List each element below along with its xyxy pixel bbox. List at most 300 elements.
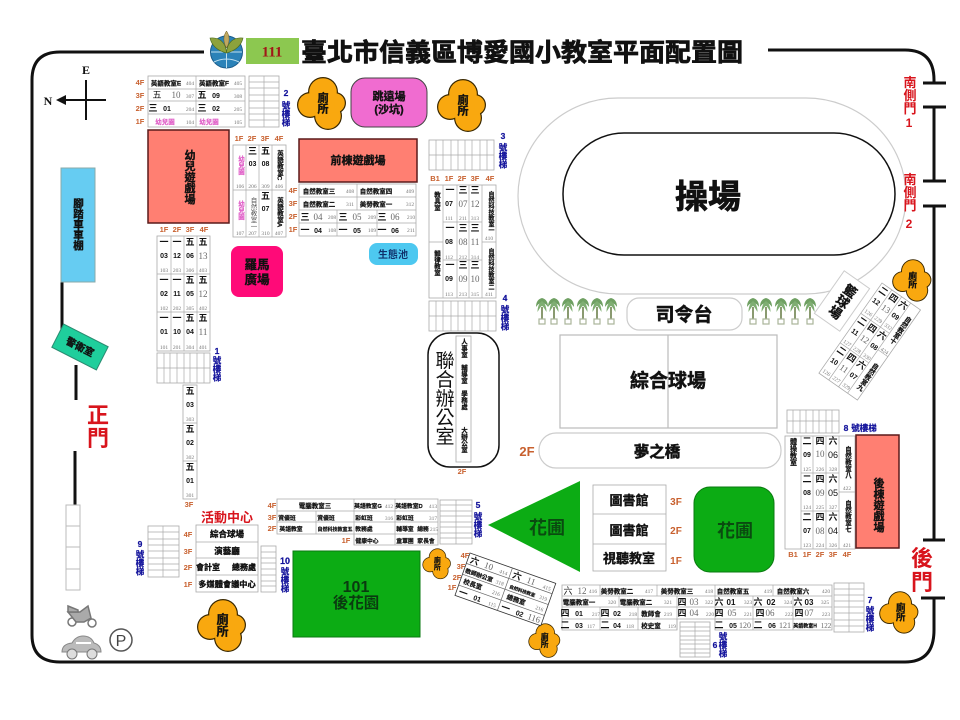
classroom table: south wing: 221 xyxy=(744,612,752,618)
classroom table: back wing: 1F xyxy=(803,550,812,559)
classroom table: front wing: 311 xyxy=(346,202,354,208)
activity centre: 4F xyxy=(184,530,193,539)
classroom table: rotated east wing: 11 xyxy=(838,362,850,375)
classroom table: south wing: 二 xyxy=(714,620,724,630)
classroom table: south block: 資優班 xyxy=(317,514,335,522)
multipurpose court: 綜合球場 xyxy=(630,369,706,392)
classroom table: back wing: 123 xyxy=(803,543,811,549)
classroom table: rotated east wing: 六 xyxy=(897,298,910,312)
classroom table: kindergarten wing: 自然教室一 xyxy=(249,195,257,229)
stairs 3: 號樓梯 xyxy=(498,143,508,170)
classroom table: south wing: 419 xyxy=(764,589,772,595)
classroom table: left wing: 305 xyxy=(186,306,194,312)
library block: 圖書館 xyxy=(609,493,649,508)
rome plaza: 廣場 xyxy=(244,272,270,287)
classroom table: front wing: 美勞教室一 xyxy=(360,200,393,208)
compass xyxy=(44,63,106,120)
back playground xyxy=(856,435,899,548)
classroom table: centre wing: 213 xyxy=(459,292,467,298)
classroom table: rotated south wing: 216 xyxy=(491,590,501,598)
classroom table: back wing: 422 xyxy=(843,486,851,492)
classroom table: back wing: 四 xyxy=(815,474,825,484)
title: 臺北市信義區博愛國小教室平面配置圖 xyxy=(301,38,743,67)
south side gate 2 label: 2 xyxy=(906,217,913,231)
back playground: 後棟遊戲場 xyxy=(872,476,884,533)
building: guard room xyxy=(52,324,108,370)
classroom table: south block: 英語教室 xyxy=(279,525,303,533)
classroom table: centre wing: 212 xyxy=(459,255,467,261)
classroom table: centre wing: 三 xyxy=(470,260,480,270)
classroom table: left wing: 401 xyxy=(199,345,207,351)
classroom table: left wing: 11 xyxy=(173,291,181,298)
classroom table: back wing: 六 xyxy=(828,435,838,446)
classroom table: left wing: 一 xyxy=(172,275,182,285)
classroom table: south wing: 418 xyxy=(705,589,713,595)
classroom table: rotated south wing: 318 xyxy=(495,579,505,588)
classroom table: kindergarten wing: 1F xyxy=(235,134,244,143)
classroom table: kindergarten wing: 406 xyxy=(275,184,283,190)
library block: 3F xyxy=(670,497,682,508)
classroom table: rotated south wing: 校長室 xyxy=(462,577,484,592)
classroom column: grade 5 xyxy=(183,385,197,509)
classroom table: south wing: 六 xyxy=(753,596,763,607)
classroom table: left wing: 3F xyxy=(186,225,195,234)
classroom table: rotated east wing: 四 xyxy=(866,322,879,335)
stairs 3: 3 xyxy=(501,131,506,141)
parking grid xyxy=(66,505,80,590)
classroom table: centre wing: 411 xyxy=(485,292,493,298)
classroom table: kindergarten wing: 幼兒園 xyxy=(236,199,245,221)
rotated court xyxy=(814,271,870,331)
classroom table: centre wing xyxy=(429,174,496,298)
classroom table: top left: 3F xyxy=(136,91,145,100)
classroom table: rotated south wing: 總務室 xyxy=(505,592,527,607)
classroom table: front wing: 109 xyxy=(368,228,376,234)
classroom table: centre wing: 三 xyxy=(470,185,480,195)
classroom table: centre wing: 三 xyxy=(458,260,468,270)
classroom table: rotated south wing: 教師辦公室 xyxy=(464,567,494,584)
classroom table: centre wing: 08 xyxy=(445,239,453,246)
pond: 生態池 xyxy=(378,248,408,261)
stairs 8 xyxy=(787,410,877,433)
classroom column: grade 5: 303 xyxy=(186,417,194,423)
south side gate 1 label: 南側門 xyxy=(902,76,916,116)
classroom table: front wing: 408 xyxy=(346,189,354,195)
classroom table: left wing: 02 xyxy=(160,291,168,298)
classroom table: front wing: 06 xyxy=(390,212,400,222)
classroom table: top left: 4F xyxy=(136,78,145,87)
classroom table: south wing: 05 xyxy=(728,608,737,618)
classroom table: rotated south wing: 115 xyxy=(487,601,497,610)
classroom table: south wing: 自然教室五 xyxy=(717,586,750,596)
classroom table: rotated south wing: 01 xyxy=(472,595,482,604)
classroom table: centre wing: 112 xyxy=(445,255,453,261)
classroom table: south wing: 六 xyxy=(714,596,724,607)
library block xyxy=(593,485,682,571)
toilet 1: 廁所 xyxy=(316,91,328,115)
classroom table: back wing: 4F xyxy=(843,550,852,559)
classroom table: kindergarten wing: 2F xyxy=(248,134,257,143)
activity centre xyxy=(184,510,258,592)
classroom table: centre wing: 10 xyxy=(470,274,480,284)
south side gate 2 label: 南側門 xyxy=(902,172,916,213)
classroom table: top left: 204 xyxy=(186,107,194,113)
sand pit: 跳遠場 xyxy=(372,89,406,103)
classroom table: south wing: 06 xyxy=(766,608,775,618)
stairs 9 xyxy=(135,526,179,577)
classroom table: left wing: 一 xyxy=(159,313,169,323)
classroom table: rotated east wing: 228 xyxy=(851,346,862,356)
classroom table: rotated south wing: 六 xyxy=(511,569,523,582)
classroom table: rotated east wing: 二 xyxy=(835,344,848,358)
classroom table: front wing: 一 xyxy=(377,225,387,235)
classroom table: rotated east wing: 08 xyxy=(868,342,879,352)
classroom column: grade 5: 五 xyxy=(185,462,195,472)
classroom table: top left: 205 xyxy=(234,107,242,113)
classroom table: back wing: 226 xyxy=(816,467,824,473)
classroom table: back wing: 327 xyxy=(829,505,837,511)
classroom table: top left: 三 xyxy=(148,103,158,113)
classroom table: back wing: 07 xyxy=(803,528,811,535)
classroom table: south block: 輔導室 xyxy=(396,525,414,533)
rounded garden xyxy=(694,487,774,572)
classroom table: south wing: 323 xyxy=(744,600,752,606)
classroom table: south wing: 04 xyxy=(690,608,699,618)
classroom table: front wing: 409 xyxy=(406,189,414,195)
classroom table: centre wing: B1 xyxy=(430,174,440,183)
year badge: 111 xyxy=(262,44,282,60)
classroom table: left wing: 101 xyxy=(160,345,168,351)
classroom table: back wing: 六 xyxy=(828,511,838,522)
classroom table: centre wing: 314 xyxy=(471,255,479,261)
classroom table: front wing: 05 xyxy=(353,228,361,235)
classroom table: south wing xyxy=(560,585,832,630)
classroom table: south block: 4F xyxy=(268,501,277,510)
classroom table: rotated east wing: 自然教室十 xyxy=(887,313,913,346)
classroom table: left wing: 12 xyxy=(198,289,208,299)
classroom table: south wing: 四 xyxy=(794,608,804,618)
joint office: 聯合辦公室 xyxy=(432,350,454,446)
year badge xyxy=(246,38,299,64)
classroom table: rotated south wing: 02 xyxy=(514,610,524,619)
stairs 8: 8 xyxy=(844,423,849,433)
classroom table: rotated south wing: 216 xyxy=(534,605,544,614)
classroom table: left wing xyxy=(157,225,210,351)
classroom table: south block: 健康中心 xyxy=(355,537,379,545)
toilet 7 xyxy=(879,591,918,634)
classroom table: south wing: 222 xyxy=(785,612,793,618)
classroom table: front wing: 05 xyxy=(352,212,362,222)
dream bridge: 2F xyxy=(519,444,535,459)
stairs 4: 4 xyxy=(503,293,508,303)
classroom table: front wing: 一 xyxy=(300,225,310,235)
stairs 9: 9 xyxy=(138,539,143,549)
classroom table: rotated east wing: 09 xyxy=(890,312,900,322)
classroom table: front wing: 一 xyxy=(338,225,348,235)
classroom table: south wing: 二 xyxy=(753,620,763,630)
classroom table: centre wing: 1F xyxy=(445,174,454,183)
classroom table: front wing xyxy=(289,184,416,236)
classroom table: south wing: 03 xyxy=(575,623,583,630)
triangle garden xyxy=(488,481,580,572)
library block: 1F xyxy=(670,556,682,567)
classroom table: kindergarten wing: 106 xyxy=(236,184,244,190)
classroom table: south block: 資優班 xyxy=(278,514,296,522)
classroom table: back wing: 06 xyxy=(828,450,838,460)
classroom table: south wing: 英語教室H xyxy=(793,622,817,630)
classroom table: back wing: 六 xyxy=(828,473,838,484)
classroom table: centre wing: 12 xyxy=(470,199,480,209)
stairs 7 xyxy=(834,583,875,633)
icon: parking sign xyxy=(110,629,132,651)
classroom table: centre wing: 三 xyxy=(470,223,480,233)
activity centre: 1F xyxy=(184,580,193,589)
palms right xyxy=(747,298,816,324)
stairs 4: 號樓梯 xyxy=(500,305,510,332)
classroom table: rotated south wing: 11 xyxy=(525,575,537,587)
classroom table: kindergarten wing: 03 xyxy=(249,161,256,168)
classroom table: centre wing: 08 xyxy=(458,237,468,247)
classroom table: south wing: 223 xyxy=(822,612,830,618)
classroom table: south block: 317 xyxy=(429,516,437,522)
classroom column: grade 5: 302 xyxy=(186,455,194,461)
building: guard room: 警衛室 xyxy=(64,334,96,360)
classroom table: front wing: 2F xyxy=(289,212,298,221)
kindergarten playground: 幼兒遊戲場 xyxy=(183,148,196,205)
classroom table: top left: 1F xyxy=(136,117,145,126)
toilet 7: 廁所 xyxy=(894,602,905,622)
stairs 7: 7 xyxy=(868,595,873,605)
classroom table: front wing: 209 xyxy=(368,215,376,221)
classroom table: centre wing: 111 xyxy=(445,216,453,222)
classroom table: top left: 09 xyxy=(212,93,220,100)
classroom table: front wing: 04 xyxy=(314,228,322,235)
classroom table: south wing: 03 xyxy=(805,598,814,607)
classroom table: left wing: 一 xyxy=(172,313,182,323)
stairs 6: 號樓梯 xyxy=(718,632,728,659)
classroom table: rotated east wing: 二 xyxy=(877,285,890,298)
rotated floor labels: 2F xyxy=(453,573,462,582)
classroom table: left wing: 五 xyxy=(185,275,195,285)
classroom table: back wing: 421 xyxy=(843,543,851,549)
classroom table: rotated east wing: 127 xyxy=(842,339,852,349)
classroom table: south wing: 四 xyxy=(560,608,570,618)
stairs 4 xyxy=(429,293,510,332)
classroom table: south wing: 321 xyxy=(664,600,672,606)
classroom table: rotated east wing: 10 xyxy=(829,357,839,367)
classroom table: centre wing: 三 xyxy=(458,223,468,233)
classroom table: rotated east wing: 332 xyxy=(883,322,893,332)
icon: scooter xyxy=(68,606,96,627)
classroom table: front wing: 自然教室四 xyxy=(360,186,392,196)
building: bicycle shed xyxy=(61,168,95,282)
classroom table: front wing: 自然教室三 xyxy=(303,186,336,196)
classroom table: front wing: 4F xyxy=(289,186,298,195)
activity centre: 3F xyxy=(184,547,193,556)
classroom table: south wing: 420 xyxy=(822,589,830,595)
classroom column: grade 5: 五 xyxy=(185,386,195,396)
classroom table: left wing: 202 xyxy=(173,306,181,312)
classroom column: grade 5: 301 xyxy=(186,493,194,499)
classroom table: south block xyxy=(268,499,438,545)
back gate label xyxy=(911,546,933,595)
front playground xyxy=(299,139,417,182)
joint office: 2F xyxy=(458,467,467,476)
classroom table: kindergarten wing xyxy=(233,134,286,237)
classroom table: back wing: 08 xyxy=(816,526,825,536)
classroom table: top left: 2F xyxy=(136,104,145,113)
classroom table: kindergarten wing: 五 xyxy=(261,191,270,201)
stairs 5: 號樓梯 xyxy=(473,512,483,539)
classroom table: top left: 10 xyxy=(172,90,181,100)
classroom table: south wing: 119 xyxy=(668,624,676,630)
classroom table: back wing: 2F xyxy=(816,550,825,559)
toilet 4 xyxy=(197,599,246,652)
classroom table: south wing: 220 xyxy=(706,612,714,618)
classroom table: kindergarten wing: 310 xyxy=(261,231,270,237)
classroom table: left wing: 201 xyxy=(173,345,181,351)
classroom table: south wing: 217 xyxy=(592,612,600,618)
classroom table: left wing: 102 xyxy=(160,306,168,312)
classroom table: south wing: 219 xyxy=(664,612,672,618)
classroom table: south block: 總務 xyxy=(417,525,429,533)
classroom table: south wing: 04 xyxy=(613,623,621,630)
activity centre: 演藝廳 xyxy=(214,546,240,556)
classroom table: front wing: 3F xyxy=(289,199,298,208)
classroom table: back wing: 四 xyxy=(815,512,825,522)
classroom table: left wing: 一 xyxy=(159,275,169,285)
classroom table: centre wing: 410 xyxy=(485,236,493,242)
classroom table: front wing: 06 xyxy=(391,228,399,235)
classroom table: back wing: 125 xyxy=(803,467,811,473)
classroom table: back wing: 09 xyxy=(803,452,811,459)
classroom table: top left: 幼兒園 xyxy=(199,117,219,126)
classroom table: left wing: 一 xyxy=(159,237,169,247)
classroom table: south wing: 四 xyxy=(600,608,610,618)
dream bridge: 夢之橋 xyxy=(634,442,681,461)
classroom table: left wing: 13 xyxy=(198,251,208,261)
classroom table: top left: 五 xyxy=(152,90,162,100)
classroom table: kindergarten wing: 207 xyxy=(248,231,257,237)
activity centre: 活動中心 xyxy=(201,510,253,525)
classroom table: centre wing: 07 xyxy=(458,199,468,209)
classroom table: top left: 三 xyxy=(197,103,207,113)
classroom table: top left: 02 xyxy=(212,106,220,113)
classroom table: rotated east wing: 六 xyxy=(855,357,868,372)
classroom table: front wing: 三 xyxy=(300,212,310,222)
classroom table: left wing: 一 xyxy=(172,237,182,247)
library block: 圖書館 xyxy=(609,523,649,538)
title bar xyxy=(210,31,743,68)
classroom table: rotated south wing: 415 xyxy=(542,584,552,593)
classroom table: south block: 自然科技教室五 xyxy=(317,526,353,533)
classroom table: kindergarten wing: 407 xyxy=(275,231,283,237)
classroom table: south wing: 自然教室六 xyxy=(777,586,810,596)
classroom table: centre wing: 315 xyxy=(471,292,479,298)
classroom table: left wing: 五 xyxy=(198,275,208,285)
sports field track xyxy=(518,98,906,294)
classroom table: top left: 五 xyxy=(197,90,207,100)
classroom table: front wing: 210 xyxy=(407,215,415,221)
classroom table: left wing: 2F xyxy=(173,225,182,234)
classroom table: back wing: 二 xyxy=(802,436,812,446)
back garden 101: 101 xyxy=(343,579,369,596)
stairs 1: 1 xyxy=(215,346,220,356)
classroom table: back wing xyxy=(785,435,855,559)
classroom table: front wing: 1F xyxy=(289,225,298,234)
classroom table: south wing: 電腦教室一 xyxy=(563,598,596,606)
classroom table: top left: 307 xyxy=(186,94,194,100)
stairs 8: 號樓梯 xyxy=(851,423,877,433)
classroom table: south wing: 118 xyxy=(626,624,634,630)
library block: 2F xyxy=(670,526,682,537)
classroom table: front wing: 211 xyxy=(407,228,415,234)
classroom table: rotated east wing: 12 xyxy=(858,333,871,346)
joint office: 學務處 xyxy=(460,389,468,411)
classroom table: front wing: 三 xyxy=(377,212,387,222)
rotated floor labels: 3F xyxy=(457,562,466,571)
classroom table: centre wing: 07 xyxy=(445,201,453,208)
classroom table: back wing: 二 xyxy=(802,512,812,522)
back garden 101: 後花園 xyxy=(333,593,379,612)
classroom table: rotated east wing: 自然教室九 xyxy=(854,360,881,393)
classroom table: back wing: 124 xyxy=(803,505,811,511)
classroom table: centre wing: 4F xyxy=(486,174,495,183)
classroom table: south wing: 218 xyxy=(629,612,637,618)
classroom column: grade 5: 01 xyxy=(186,478,194,485)
classroom table: south wing: 12 xyxy=(578,586,586,596)
joint office: 大辦公室 xyxy=(460,426,468,453)
rounded garden: 花圃 xyxy=(717,521,753,541)
stairs 6 xyxy=(680,622,728,659)
stairs 1 xyxy=(157,346,222,383)
classroom table: left wing: 1F xyxy=(160,225,169,234)
classroom table: south wing: 324 xyxy=(784,600,792,606)
classroom table: top left: 405 xyxy=(234,81,242,87)
classroom table: rotated south wing: 414 xyxy=(498,569,508,578)
classroom table: back wing: 05 xyxy=(828,488,838,498)
classroom table: south block: 412 xyxy=(385,504,393,510)
classroom table: south wing: 二 xyxy=(560,620,570,630)
classroom table: left wing: 11 xyxy=(199,327,207,337)
back gate label: 門 xyxy=(911,570,933,595)
classroom table: south block: 彩虹班 xyxy=(355,514,373,522)
classroom table: back wing: 3F xyxy=(829,550,838,559)
triangle garden: 花圃 xyxy=(529,518,565,538)
classroom table: left wing: 五 xyxy=(198,313,208,323)
classroom table: south wing: 417 xyxy=(645,589,653,595)
classroom table: south wing: 校史室 xyxy=(641,621,661,630)
classroom table: left wing: 103 xyxy=(160,268,168,274)
activity centre: 多媒體會議中心 xyxy=(198,579,256,589)
classroom table: south wing: 二 xyxy=(600,620,610,630)
classroom table: left wing: 10 xyxy=(173,329,181,336)
classroom table: rotated south wing: 10 xyxy=(483,560,495,572)
dream bridge xyxy=(519,433,781,468)
classroom table: back wing: 四 xyxy=(815,436,825,446)
classroom table: kindergarten wing: 206 xyxy=(248,184,257,190)
classroom table: rotated south wing: 一 xyxy=(457,587,469,599)
classroom table: back wing: 體操教室 xyxy=(790,437,797,466)
classroom table: centre wing: 教具室 xyxy=(432,190,441,211)
back gate label: 後 xyxy=(911,546,933,571)
classroom table: south block: 215 xyxy=(430,527,438,533)
south side gate 1 label: 1 xyxy=(906,116,913,130)
classroom table: top left: 幼兒園 xyxy=(155,117,175,126)
icon: car xyxy=(62,636,101,659)
classroom column: grade 5: 3F xyxy=(185,500,194,509)
sports field track: 操場 xyxy=(675,178,741,215)
